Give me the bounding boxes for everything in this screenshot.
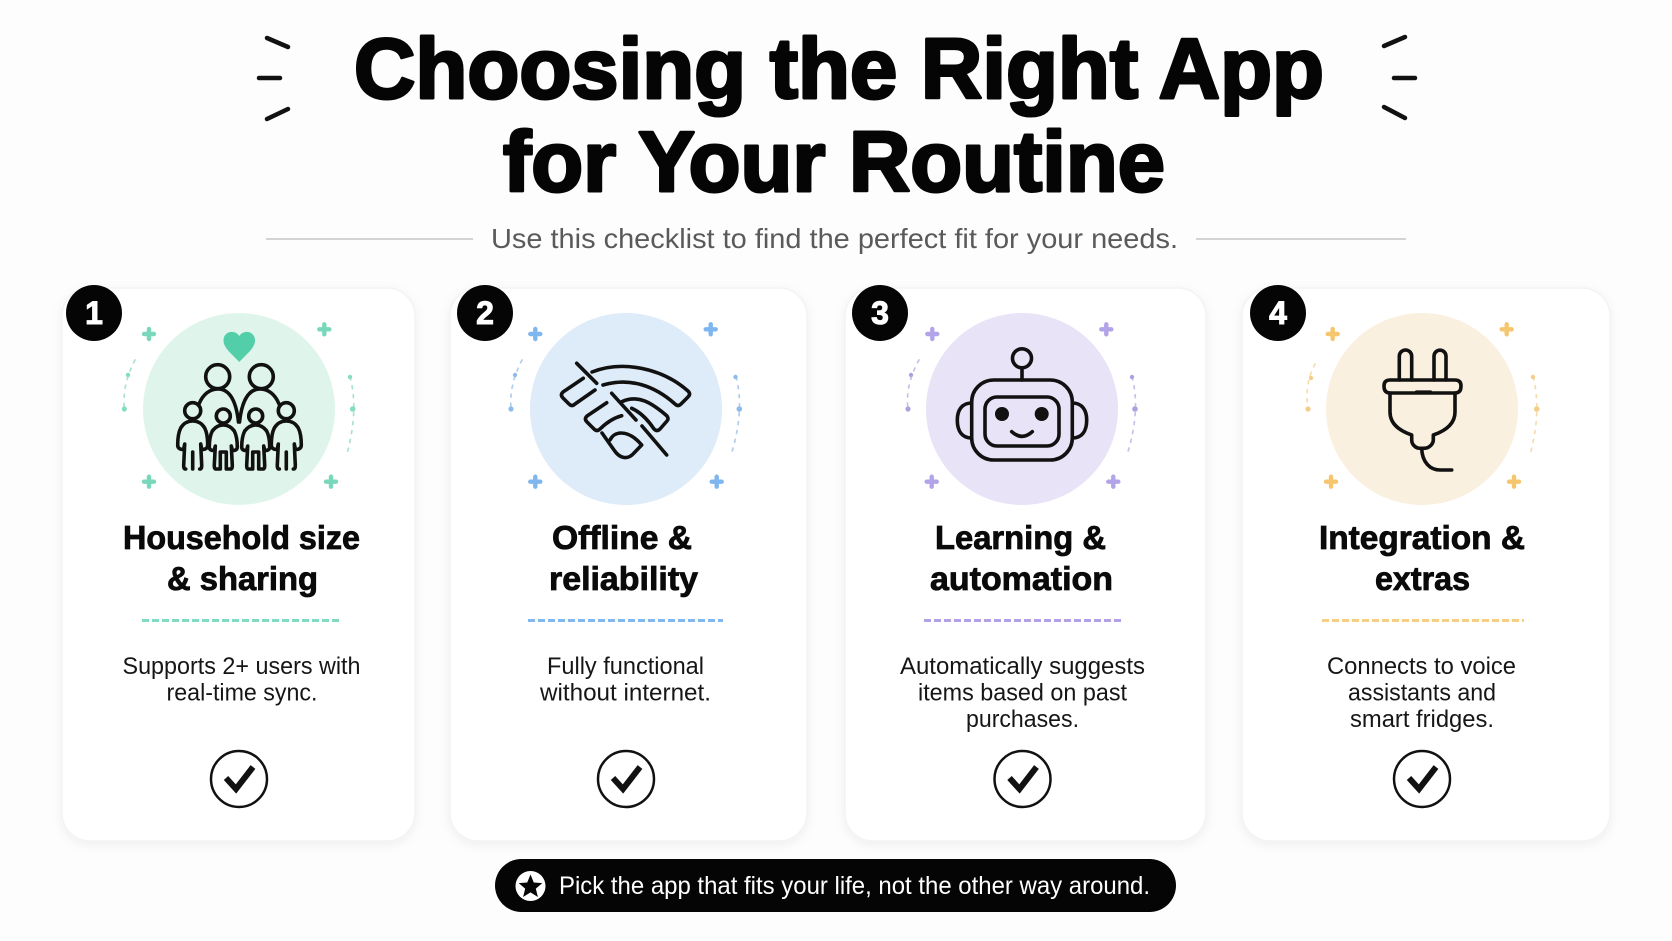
description: Supports 2+ users with	[122, 653, 360, 680]
icon: right accent strokes	[1384, 37, 1415, 118]
icon: robot	[905, 313, 1138, 505]
heading: automation	[930, 560, 1113, 597]
description: purchases.	[966, 706, 1079, 733]
heading	[930, 519, 1113, 597]
number badge 2	[457, 285, 513, 341]
description: assistants and	[1348, 680, 1496, 706]
description	[900, 653, 1145, 733]
check mark	[994, 751, 1050, 807]
description: Fully functional	[547, 653, 704, 680]
title	[354, 22, 1324, 210]
number badge 2: 2	[476, 295, 494, 331]
check mark	[211, 751, 267, 807]
icon: family	[122, 313, 356, 505]
description: without internet.	[539, 680, 711, 706]
panel: integration and extras	[1242, 285, 1610, 841]
title: Choosing the Right App	[354, 22, 1324, 117]
heading: Household size	[123, 519, 360, 556]
heading: extras	[1375, 560, 1470, 597]
description: real-time sync.	[166, 680, 318, 706]
description: smart fridges.	[1350, 706, 1494, 733]
title: for Your Routine	[503, 115, 1165, 210]
heading	[123, 519, 360, 597]
check mark	[1394, 751, 1450, 807]
number badge 3	[852, 285, 908, 341]
callout: bottom banner	[495, 859, 1176, 912]
heading: Offline &	[552, 519, 692, 556]
icon: wifi off	[508, 313, 742, 505]
icon: plug	[1305, 313, 1539, 505]
icon: left accent strokes	[259, 38, 288, 119]
panel: offline and reliability	[450, 285, 807, 841]
heading: & sharing	[167, 560, 318, 597]
number badge 1	[66, 285, 122, 341]
description	[122, 653, 360, 706]
heading	[549, 519, 699, 597]
heading: Learning &	[935, 519, 1106, 556]
callout: bottom banner: Pick the app that fits your life, not the other way around.	[559, 872, 1150, 900]
description: Connects to voice	[1327, 653, 1516, 680]
description	[1327, 653, 1516, 733]
heading	[1319, 519, 1525, 597]
description: Automatically suggests	[900, 653, 1145, 680]
number badge 3: 3	[871, 295, 889, 331]
icon: star	[516, 871, 546, 901]
subtitle: Use this checklist to find the perfect fit for your needs.	[491, 223, 1178, 254]
description	[539, 653, 711, 706]
heading: Integration &	[1319, 519, 1525, 556]
number badge 4: 4	[1269, 295, 1287, 331]
description: items based on past	[918, 680, 1127, 706]
check mark	[598, 751, 654, 807]
number badge 4	[1250, 285, 1306, 341]
panel: learning and automation	[845, 285, 1206, 841]
heading: reliability	[549, 560, 699, 597]
panel: household size and sharing	[62, 285, 415, 841]
number badge 1: 1	[85, 295, 103, 331]
